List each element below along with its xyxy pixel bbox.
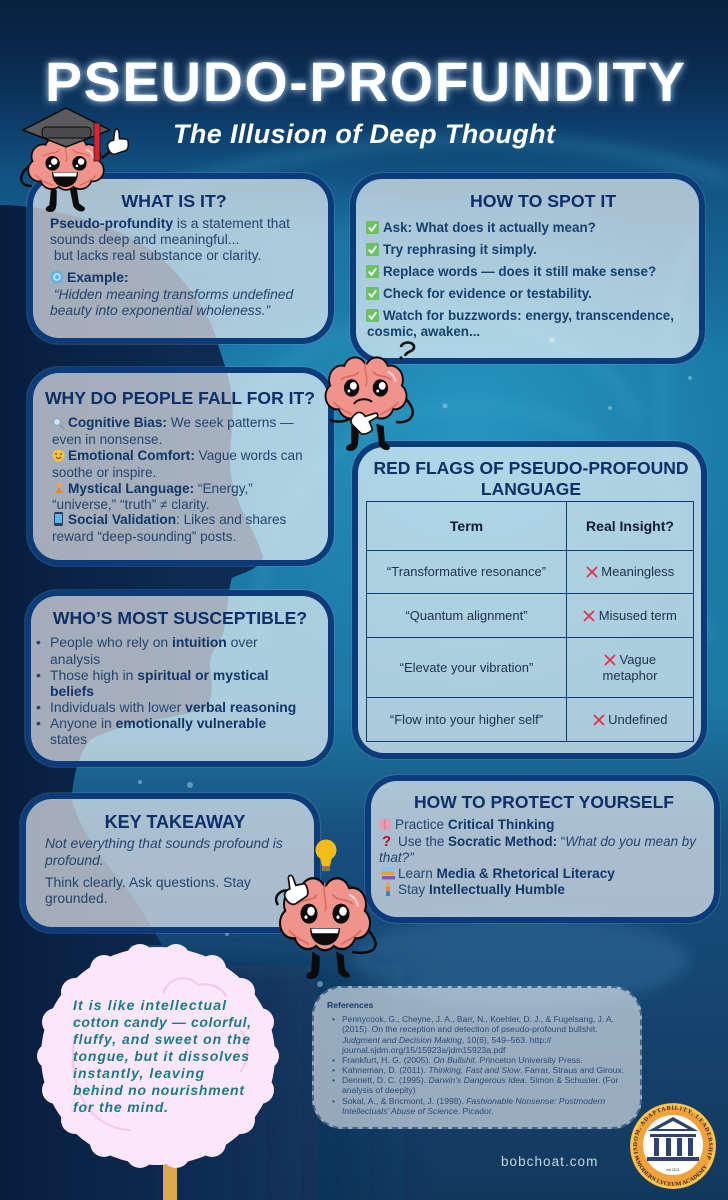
text: example label: Example: <box>67 269 129 285</box>
heading: red flags: LANGUAGE <box>481 479 581 499</box>
panel: key takeaway <box>20 793 320 933</box>
reference list: • <box>332 1096 335 1106</box>
checklist: Ask: What does it actually mean? <box>383 220 596 235</box>
panel: references <box>312 986 642 1129</box>
text: definition: sounds deep and meaningful... <box>50 231 239 247</box>
candy quote <box>73 997 251 1115</box>
list of reasons: Emotional Comfort: Vague words can <box>68 448 303 463</box>
text: example quote: “Hidden meaning transforms undefined <box>54 286 293 302</box>
text: think clearly: Think clearly. Ask questions. Stay <box>45 874 251 890</box>
list of protections: that?” <box>379 850 414 865</box>
reference list: • <box>332 1075 335 1085</box>
list of reasons: Cognitive Bias: We seek patterns — <box>68 415 294 430</box>
mascot: brain with lightbulb <box>276 840 376 978</box>
checklist <box>366 220 674 339</box>
text: not everything: Not everything that sounds profound is <box>45 835 283 851</box>
cotton candy <box>37 944 279 1200</box>
table: term vs real insight: “Quantum alignment” <box>405 608 528 622</box>
checklist: Check for evidence or testability. <box>383 286 592 301</box>
table: term vs real insight: “Flow into your higher self” <box>390 712 543 726</box>
checklist: Watch for buzzwords: energy, transcendence, <box>383 308 674 323</box>
reference list: • <box>332 1014 335 1024</box>
candy quote: tongue, but it dissolves <box>73 1048 249 1064</box>
title: The Illusion of Deep Thought <box>173 119 556 149</box>
table: term vs real insight: Term <box>450 518 483 534</box>
title <box>42 51 688 149</box>
question mark <box>401 342 414 356</box>
list of reasons: even in nonsense. <box>52 432 162 447</box>
bullet list: People who rely on intuition over <box>50 634 258 650</box>
heading: red flags <box>373 458 688 499</box>
reference list: Kahneman, D. (2011). Thinking, Fast and Slow. Farrar, Straus and Giroux. <box>342 1065 624 1075</box>
candy quote: fluffy, and sweet on the <box>73 1031 250 1047</box>
list of protections: Learn Media & Rhetorical Literacy <box>398 866 615 881</box>
heading: why do people fall for it: WHY DO PEOPLE FALL FOR IT? <box>45 388 315 408</box>
list of reasons: reward “deep-sounding” posts. <box>52 529 236 544</box>
panel: how to spot it <box>350 173 705 364</box>
list of reasons: Social Validation: Likes and shares <box>68 512 286 527</box>
list of protections: Practice Critical Thinking <box>395 817 554 832</box>
reference list: • <box>332 1065 335 1075</box>
mascot: brain with graduation cap <box>21 108 129 211</box>
bullet list: • <box>36 634 41 650</box>
reference list: journal.sjdm.org/15/15923a/jdm15923a.pdf <box>342 1045 505 1055</box>
table: term vs real insight: “Elevate your vibration” <box>400 660 533 674</box>
heading: references: References <box>327 1000 373 1010</box>
text: think clearly: grounded. <box>45 890 108 906</box>
panel: how to protect yourself <box>365 775 720 923</box>
reference list <box>332 1014 624 1116</box>
list of reasons: “universe,” “truth” ≠ clarity. <box>52 497 210 512</box>
candy stick <box>163 1165 177 1200</box>
table: term vs real insight <box>366 501 694 742</box>
reference list: Sokal, A., & Bricmont, J. (1998). Fashionable Nonsense: Postmodern <box>342 1096 605 1106</box>
icon: example swirl <box>50 270 64 284</box>
bullet list: beliefs <box>50 683 94 699</box>
list of protections: ? <box>382 833 391 850</box>
title: PSEUDO-PROFUNDITY <box>45 51 685 113</box>
checklist: Try rephrasing it simply. <box>383 242 537 257</box>
candy quote: It is like intellectual <box>73 997 227 1013</box>
table: term vs real insight: metaphor <box>603 668 657 682</box>
list of reasons <box>52 415 303 544</box>
text: definition: Pseudo-profundity is a statement that <box>50 215 290 231</box>
bullet list: Individuals with lower verbal reasoning <box>50 699 296 715</box>
reference list: Dennett, D. C. (1995). Darwin’s Dangerous Idea. Simon & Schuster. (For <box>342 1075 618 1085</box>
heading: what is it: WHAT IS IT? <box>121 191 227 211</box>
bullet list: Those high in spiritual or mystical <box>50 667 269 683</box>
text: example quote: beauty into exponential wholeness.” <box>50 302 270 318</box>
candy quote: for the mind. <box>73 1099 168 1115</box>
checklist: Replace words — does it still make sense? <box>383 264 656 279</box>
heading: who's most susceptible: WHO’S MOST SUSCEPTIBLE? <box>53 608 307 628</box>
mascot: thinking brain <box>325 342 414 450</box>
heading: red flags: RED FLAGS OF PSEUDO-PROFOUND <box>373 458 688 478</box>
logo: modern lyceum academy: WISDOM, ADAPTABILITY, LEADERSHIP <box>633 1106 713 1162</box>
text: not everything: profound. <box>45 852 104 868</box>
list of reasons: soothe or inspire. <box>52 465 156 480</box>
heading: how to protect yourself: HOW TO PROTECT YOURSELF <box>414 792 674 812</box>
panel: what is it <box>27 173 334 344</box>
text: definition <box>50 215 290 263</box>
list of protections: Use the Socratic Method: “What do you mean by <box>398 834 696 849</box>
panel: why do people fall for it <box>27 367 334 566</box>
text: not everything <box>44 835 283 868</box>
text: definition: but lacks real substance or clarity. <box>54 247 261 263</box>
reference list: (2015). On the reception and detection of pseudo-profound bullshit. <box>342 1024 598 1034</box>
candy quote: cotton candy — colorful, <box>73 1014 251 1030</box>
heading: how to spot it: HOW TO SPOT IT <box>470 191 616 211</box>
table: term vs real insight: “Transformative resonance” <box>387 564 546 579</box>
table: term vs real insight: Real Insight? <box>586 518 674 534</box>
bullet list: • <box>36 667 41 683</box>
reference list: Judgment and Decision Making, 10(6), 549–563. http:// <box>342 1034 551 1044</box>
list of protections: Stay Intellectually Humble <box>398 882 565 897</box>
bullet list <box>36 634 296 747</box>
table: term vs real insight: Misused term <box>599 608 677 622</box>
bullet list: • <box>36 699 41 715</box>
candy quote: instantly, leaving <box>73 1065 204 1081</box>
bullet list: • <box>36 715 41 731</box>
heading: key takeaway: KEY TAKEAWAY <box>105 812 245 832</box>
logo: modern lyceum academy: est 2021 <box>666 1168 680 1172</box>
bullet list: analysis <box>50 651 100 667</box>
list of protections <box>378 817 697 897</box>
reference list: • <box>332 1055 335 1065</box>
reference list: Intellectuals’ Abuse of Science. Picador. <box>342 1106 494 1116</box>
reference list: Pennycook, G., Cheyne, J. A., Barr, N., Koehler, D. J., & Fugelsang, J. A. <box>342 1014 614 1024</box>
text: example quote <box>50 286 294 318</box>
panel: who's most susceptible <box>25 590 334 767</box>
bullet list: Anyone in emotionally vulnerable <box>50 715 266 731</box>
logo: modern lyceum academy <box>630 1103 716 1189</box>
bullet list: states <box>50 731 87 747</box>
logo: modern lyceum academy: MODERN LYCEUM ACADEMY <box>636 1160 707 1186</box>
table: term vs real insight: Undefined <box>608 712 667 726</box>
lightbulb <box>316 840 336 860</box>
panel: red flags <box>352 441 707 759</box>
candy quote: behind no nourishment <box>73 1082 245 1098</box>
table: term vs real insight: Vague <box>619 652 656 666</box>
candy swirl marks <box>73 978 248 1130</box>
reference list: analysis of deepity) <box>342 1085 416 1095</box>
candy puff <box>37 944 279 1168</box>
title: PSEUDO-PROFUNDITY <box>45 51 685 113</box>
checklist: cosmic, awaken... <box>367 324 480 339</box>
reference list: Frankfurt, H. G. (2005). On Bullshit. Princeton University Press. <box>342 1055 583 1065</box>
website label: bobchoat.com <box>501 1154 598 1169</box>
table: term vs real insight: Meaningless <box>601 564 674 579</box>
list of reasons: Mystical Language: “Energy,” <box>68 481 253 496</box>
text: think clearly <box>45 874 251 906</box>
